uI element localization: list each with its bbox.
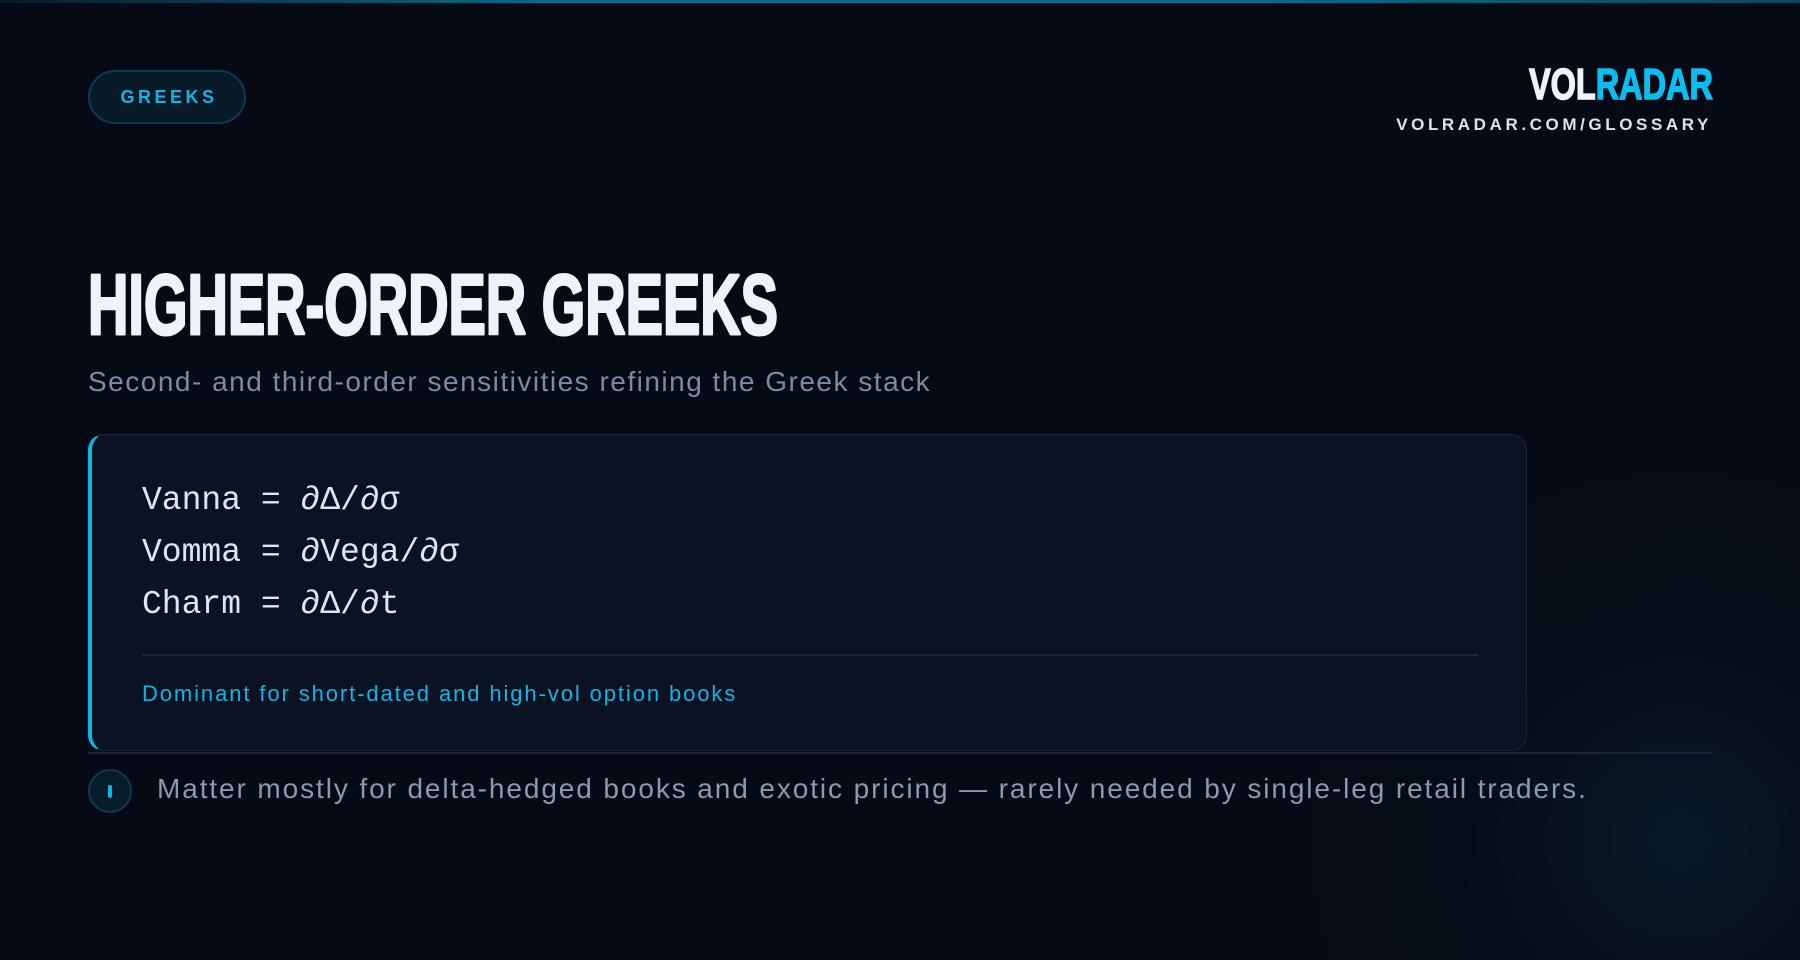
icon: info <box>88 769 132 813</box>
tag pill: GREEKS <box>88 70 246 124</box>
formulas: Vanna = ∂Δ/∂σ <box>142 482 399 519</box>
formulas <box>142 482 459 623</box>
panel: formula card <box>88 434 1527 751</box>
formulas: Vomma = ∂Vega/∂σ <box>142 534 459 571</box>
logo url: VOLRADAR.COM/GLOSSARY <box>1396 115 1712 134</box>
caption: Dominant for short-dated and high-vol option books <box>142 681 737 706</box>
formulas: Charm = ∂Δ/∂t <box>142 586 399 623</box>
note text: Matter mostly for delta-hedged books and exotic pricing — rarely needed by single-leg retail traders. <box>157 773 1588 804</box>
subtitle: Second- and third-order sensitivities refining the Greek stack <box>88 366 931 397</box>
tag pill: GREEKS: GREEKS <box>120 87 218 107</box>
